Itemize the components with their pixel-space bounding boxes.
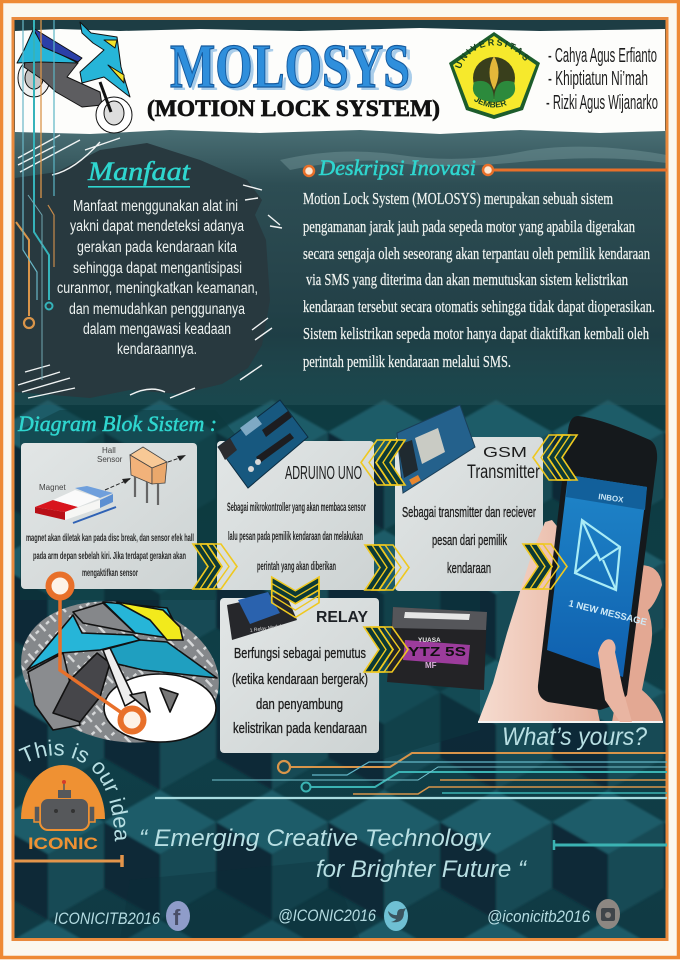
relay module (227, 592, 297, 640)
social: twitter (278, 901, 408, 931)
relay title: RELAY (316, 609, 368, 626)
manfaat body text: kendaraannya. (117, 341, 197, 358)
panel: relay card (220, 592, 379, 753)
hall sensor caption (26, 532, 194, 579)
banner: torn white strip (15, 28, 665, 134)
heading: MOLOSYS: MOLOSYS (173, 36, 414, 104)
hall sensor diagram: Hall (102, 446, 116, 455)
icon: Universitas Jember logo: JEMBER (474, 97, 507, 108)
icon: envelope (575, 520, 620, 590)
arduino caption (227, 500, 366, 573)
new message label: 1 NEW MESSAGE (567, 598, 648, 628)
gsm title: GSM (483, 444, 527, 461)
photo: hand holding phone (478, 416, 663, 723)
inbox label: INBOX (598, 492, 625, 505)
gsm module (397, 405, 475, 493)
heading: diagram blok sistem: Diagram Blok Sistem : (17, 411, 217, 436)
relay caption: Berfungsi sebagai pemutus (234, 645, 366, 662)
hall sensor diagram: Sensor (97, 455, 123, 464)
sensor pointer (48, 574, 144, 732)
battery: MF (425, 661, 437, 670)
fingers (612, 565, 663, 722)
arrow: hall to arduino (193, 544, 237, 589)
manfaat body text: dalam mengawasi keadaan (83, 321, 231, 338)
hall sensor diagram: Magnet (39, 483, 66, 492)
white scribble marks (18, 135, 282, 398)
social: instagram: @iconicitb2016 (487, 907, 590, 926)
illustration: wheel close-up (8, 584, 232, 760)
relay caption: (ketika kendaraan bergerak) (232, 671, 368, 688)
slogan: “ Emerging Creative Technology (139, 825, 492, 852)
gsm caption (402, 504, 536, 577)
manfaat body text: sehingga dapat mengantisipasi (73, 260, 242, 277)
panel: arduino card: lalu pesan pada pemilik kendaraan dan melakukan (228, 529, 363, 543)
social: facebook (54, 901, 190, 931)
gsm title: Transmitter (467, 462, 541, 483)
dark blob background (15, 143, 270, 398)
text: Sebagai mikrokontroller yang akan membaca sensor (227, 500, 366, 514)
panel: arduino card (217, 400, 374, 590)
arrow: arduino to relay (272, 577, 319, 617)
manfaat body text: gerakan pada kendaraan kita (77, 239, 237, 256)
manfaat body text: Manfaat menggunakan alat ini (73, 198, 238, 215)
deskripsi body text (303, 189, 655, 371)
icon: motorcycle (17, 22, 132, 133)
relay module: 1 Relay Module (249, 623, 285, 634)
tagline: what's yours: What’s yours? (502, 723, 647, 751)
arrow: arduino to gsm incoming (361, 440, 405, 485)
heading: Manfaat: Manfaat (87, 157, 191, 186)
phone screen (547, 475, 647, 677)
gsm title (467, 444, 541, 483)
arrow: transmitter incoming (533, 435, 577, 480)
social: facebook: f (173, 905, 181, 930)
gsm caption: kendaraan (447, 560, 491, 577)
arrow: arduino to gsm (365, 545, 409, 590)
palm (478, 520, 600, 722)
panel: manfaat (15, 135, 282, 398)
icon: Universitas Jember logo (449, 32, 540, 119)
circuit lines: top left (16, 20, 54, 380)
title banner (15, 22, 665, 134)
battery: YTZ 5S (408, 644, 466, 659)
battery (387, 607, 487, 690)
slogan: for Brighter Future “ (316, 856, 528, 883)
heading with connector dots (304, 155, 667, 180)
thumb (598, 639, 632, 722)
gsm caption: pesan dari pemilik (432, 532, 507, 549)
icon: iconic robot logo (21, 765, 105, 853)
curved text: this is our idea: This is our idea (18, 740, 128, 842)
relay caption: dan penyambung (256, 696, 343, 713)
arduino board (218, 400, 308, 488)
deskripsi body text: perintah pemilik kendaraan melalui SMS. (303, 352, 511, 371)
relay caption (232, 645, 368, 737)
battery: YUASA (418, 637, 441, 644)
manfaat body text: curanmor, meningkatkan keamanan, (57, 280, 258, 297)
hall sensor diagram (35, 446, 186, 523)
relay caption: kelistrikan pada kendaraan (233, 720, 367, 737)
arrow: gsm to phone (523, 544, 567, 589)
phone body (538, 416, 657, 710)
hall sensor caption: magnet akan diletak kan pada disc break, dan sensor efek hall (26, 532, 194, 544)
team member names (546, 45, 658, 114)
hall sensor caption: pada arm depan sebelah kiri. Jika terdapat gerakan akan (33, 550, 186, 562)
subheading: motion lock system: (MOTION LOCK SYSTEM) (147, 96, 440, 121)
arduino title: ADRUINO UNO (285, 463, 362, 483)
icon: iconic robot logo: ICONIC (28, 834, 98, 853)
panel: deskripsi inovasi (303, 155, 667, 371)
manfaat body text (57, 198, 258, 358)
panel: hall sensor card (21, 443, 197, 589)
inbox bar (566, 475, 647, 510)
social: instagram (487, 899, 620, 929)
social: twitter: @ICONIC2016 (278, 906, 376, 925)
hall sensor caption: mengaktifkan sensor (82, 567, 138, 579)
white strip under photo (478, 721, 663, 723)
arrow: relay to battery (364, 627, 408, 672)
slogan (139, 825, 528, 883)
circuit lines: right (14, 753, 667, 867)
gsm caption: Sebagai transmitter dan reciever (402, 504, 536, 521)
panel: gsm transmitter card (395, 405, 543, 591)
heading: MOLOSYS: MOLOSYS (170, 33, 410, 101)
manfaat body text: dan memudahkan penggunanya (69, 301, 245, 318)
heading with connector dots: Deskripsi Inovasi (318, 155, 476, 180)
social: facebook: ICONICITB2016 (54, 909, 160, 928)
manfaat body text: yakni dapat mendeteksi adanya (70, 218, 244, 235)
icon: Universitas Jember logo: UNIVERSITAS (455, 39, 529, 68)
arduino caption: perintah yang akan diberikan (257, 559, 336, 573)
